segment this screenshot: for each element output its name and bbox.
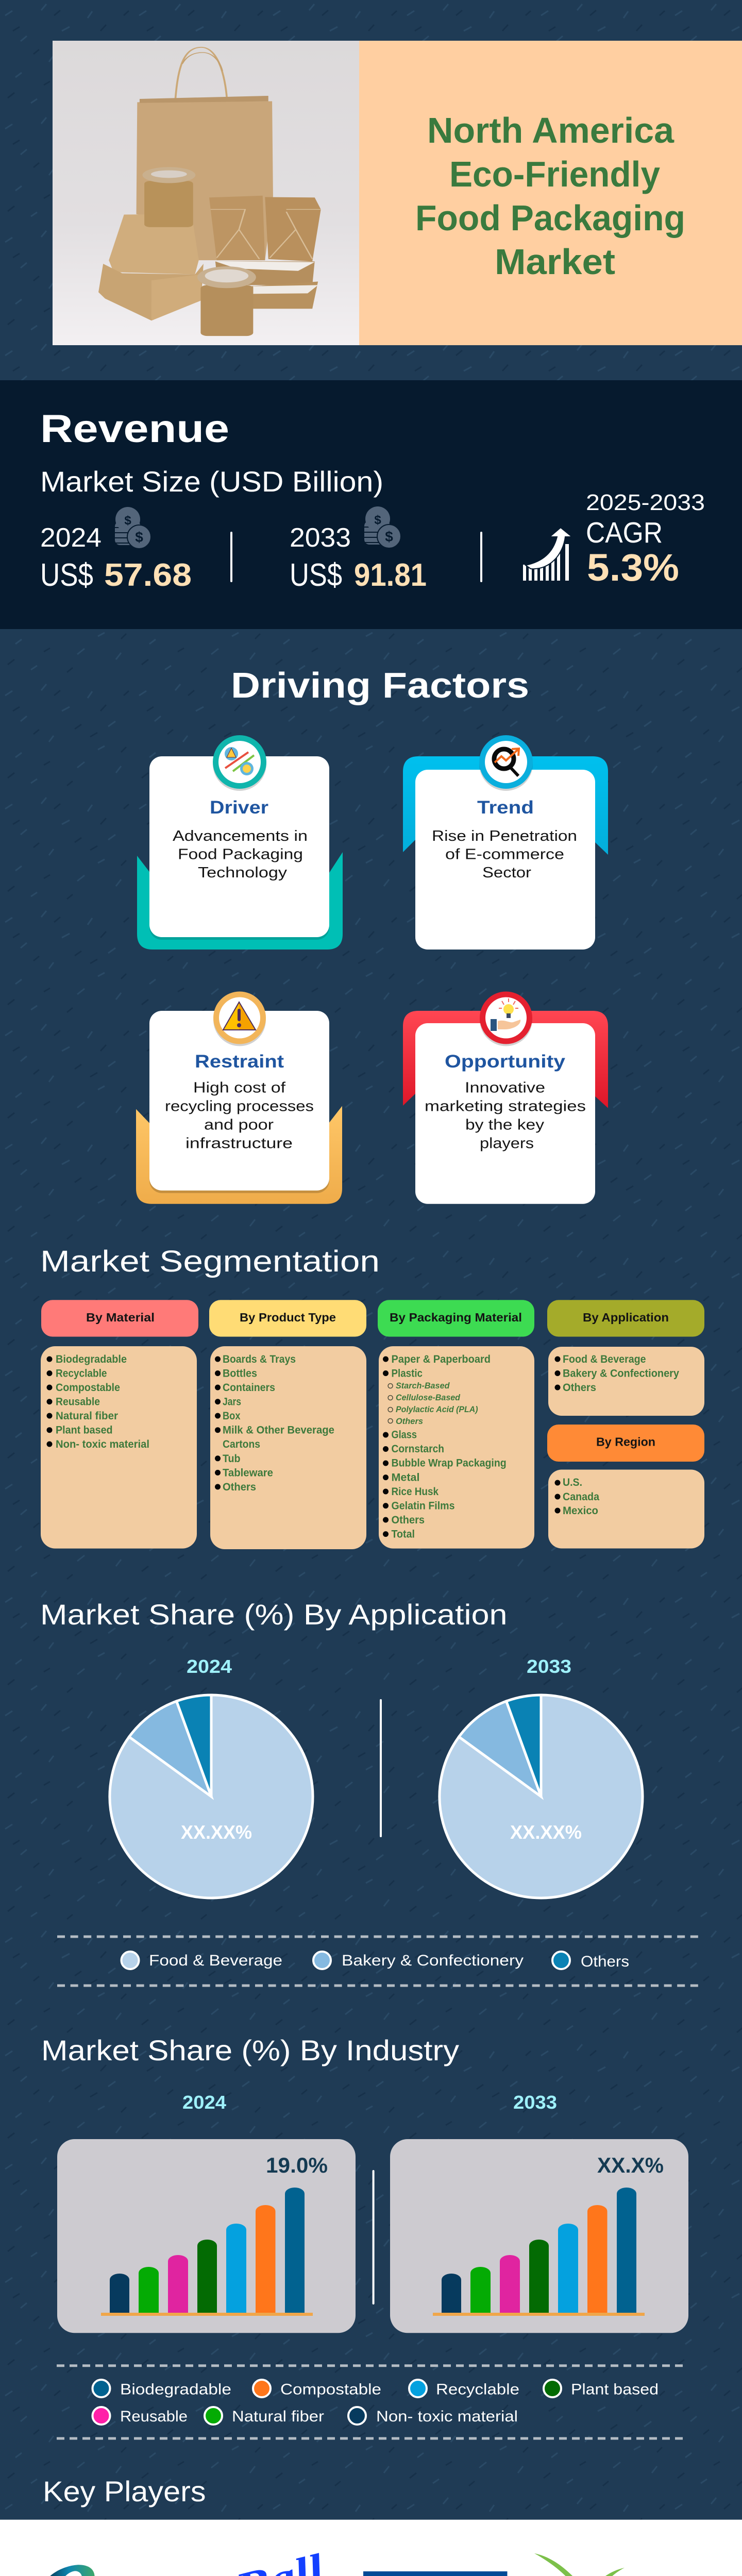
subheading: market size: Market Size (USD Billion): [40, 465, 383, 498]
header: by region: [547, 1425, 704, 1462]
label: trend: Trend: [477, 798, 534, 818]
year label 2024: 2024: [182, 2092, 226, 2113]
text: driver body: Advancements in: [173, 828, 308, 844]
text: opportunity body: [425, 1080, 586, 1151]
list: application: Food & Beverage: [563, 1353, 646, 1365]
text: trend body: Rise in Penetration: [432, 828, 577, 844]
list: material: Natural fiber: [56, 1410, 118, 1422]
panel: revenue: [0, 380, 742, 629]
list: region: Mexico: [563, 1505, 598, 1517]
stat: CAGR: 5.3%: [587, 546, 679, 589]
label: restraint: Restraint: [195, 1052, 284, 1072]
card: driver: [137, 735, 343, 950]
list: product type: Box: [223, 1410, 241, 1422]
stat: 2024: US$: [40, 557, 93, 593]
legend: industry: Recyclable: [436, 2381, 519, 2398]
bar chart: 2024: 19.0%: [266, 2153, 328, 2177]
list: product type: Tub: [223, 1453, 240, 1465]
logo: amcor: [43, 2565, 198, 2576]
column: by material: [41, 1300, 198, 1549]
heading: driving factors: Driving Factors: [231, 665, 529, 705]
text: trend body: of E-commerce: [445, 846, 564, 862]
stat: CAGR: [586, 490, 705, 589]
title: North America: [427, 110, 674, 150]
legend: industry: [93, 2380, 659, 2425]
pie chart: 2024: [110, 1695, 313, 1898]
text: restraint body: [165, 1080, 314, 1151]
logo: BeGreen: [534, 2553, 704, 2576]
list: product type: Cartons: [223, 1438, 260, 1450]
title: Eco-Friendly: [449, 154, 660, 194]
list: material: [41, 1346, 197, 1549]
pie chart: 2033: XX.XX%: [510, 1822, 582, 1843]
list: packaging material: Others: [396, 1416, 423, 1426]
list: application: Bakery & Confectionery: [563, 1367, 679, 1380]
list: packaging material: Metal: [392, 1471, 419, 1483]
text: restraint body: recycling processes: [165, 1098, 314, 1115]
list: packaging material: Plastic: [392, 1367, 423, 1380]
legend: application: [122, 1952, 629, 1970]
list: region: Canada: [563, 1491, 599, 1503]
icon: trend badge: [479, 735, 533, 791]
list: packaging material: Total: [392, 1528, 415, 1540]
label: opportunity: Opportunity: [445, 1052, 566, 1072]
text: driver body: [173, 828, 308, 881]
card: trend: [403, 735, 608, 950]
list: material: Compostable: [56, 1382, 120, 1394]
title: [415, 110, 685, 282]
list: packaging material: Polylactic Acid (PLA): [396, 1404, 478, 1414]
list: application: [548, 1347, 704, 1416]
divider: [380, 1699, 382, 1837]
divider: [373, 2170, 375, 2304]
list: packaging material: Starch-Based: [396, 1381, 450, 1391]
legend: application: Bakery & Confectionery: [342, 1952, 524, 1969]
stat: 2024: 2024: [40, 523, 102, 553]
column: by material: By Material: [86, 1311, 155, 1324]
legend: application: Food & Beverage: [149, 1952, 282, 1969]
legend: application: Others: [581, 1953, 629, 1970]
list: product type: Tableware: [223, 1467, 273, 1479]
text: trend body: Sector: [482, 865, 531, 881]
text: restraint body: High cost of: [193, 1080, 286, 1096]
legend: industry: Reusable: [120, 2408, 188, 2425]
list: material: Biodegradable: [56, 1353, 127, 1365]
icon: coins 2024: $: [124, 514, 131, 528]
text: driver body: Technology: [198, 865, 288, 881]
heading: revenue: Revenue: [40, 407, 229, 451]
title: Market: [495, 242, 615, 282]
card: opportunity: [403, 991, 608, 1204]
icon: coins 2033: [364, 506, 401, 548]
bar chart: 2033: [390, 2139, 688, 2333]
stat: 2033: 91.81: [354, 557, 427, 593]
bar chart: 2033: XX.X%: [597, 2153, 664, 2177]
list: product type: Others: [223, 1481, 256, 1493]
icon: opportunity badge: [480, 991, 532, 1046]
column: by application and region: [547, 1300, 704, 1549]
list: packaging material: Glass: [392, 1429, 417, 1441]
icon: coins 2024: $: [135, 529, 143, 545]
stat: 2033: 2033: [290, 523, 351, 553]
year label 2033: 2033: [513, 2092, 557, 2113]
list: product type: Bottles: [223, 1367, 257, 1380]
year label 2024: 2024: [187, 1656, 232, 1677]
list: packaging material: Cornstarch: [392, 1443, 444, 1455]
list: product type: Milk & Other Beverage: [223, 1425, 334, 1436]
heading: market share by application: Market Share (%) By Application: [40, 1598, 507, 1631]
list: product type: Jars: [223, 1396, 241, 1408]
legend: industry: Compostable: [280, 2381, 381, 2398]
list: packaging material: Rice Husk: [392, 1486, 439, 1498]
list: packaging material: Gelatin Films: [392, 1500, 454, 1512]
icon: driver badge: [213, 735, 266, 791]
stat: CAGR: CAGR: [586, 516, 663, 549]
list: region: [548, 1469, 704, 1549]
list: product type: Boards & Trays: [223, 1353, 296, 1365]
stat: 2033: US$: [290, 557, 342, 593]
heading: key players: Key Players: [43, 2475, 206, 2507]
legend: industry: Plant based: [571, 2381, 659, 2398]
text: opportunity body: marketing strategies: [425, 1098, 586, 1115]
icon: coins 2033: $: [374, 513, 381, 527]
column: by product type: By Product Type: [240, 1311, 336, 1324]
column: by packaging material: [378, 1300, 534, 1549]
stat: 2024: [40, 523, 192, 593]
card: restraint: [136, 991, 342, 1204]
divider: [230, 532, 232, 582]
legend: industry: Non- toxic material: [376, 2408, 518, 2425]
heading: market share by industry: Market Share (%) By Industry: [41, 2034, 459, 2066]
header panel: [53, 41, 742, 345]
list: application: Others: [563, 1382, 596, 1394]
stat: 2024: 57.68: [104, 557, 192, 593]
legend: industry: Natural fiber: [232, 2408, 324, 2425]
icon: growth arrow: [523, 528, 572, 581]
icon: coins 2033: $: [385, 529, 393, 545]
list: material: Non- toxic material: [56, 1438, 149, 1450]
logo: BASF: [363, 2570, 507, 2576]
photo: paper food packaging: [53, 41, 359, 345]
panel: key players logos: [0, 2520, 742, 2576]
label: driver: Driver: [210, 798, 268, 818]
column: by product type: [209, 1300, 366, 1549]
column: by packaging material: By Packaging Material: [390, 1311, 522, 1324]
text: opportunity body: players: [480, 1135, 534, 1151]
text: opportunity body: by the key: [465, 1117, 545, 1133]
icon: coins 2024: [115, 507, 151, 549]
list: packaging material: Others: [392, 1514, 425, 1526]
list: packaging material: [379, 1346, 534, 1549]
list: product type: [210, 1346, 366, 1549]
text: trend body: [432, 828, 577, 881]
legend: industry: Biodegradable: [120, 2381, 231, 2398]
list: material: Recyclable: [56, 1367, 107, 1380]
title panel: [359, 41, 742, 345]
title: Food Packaging: [415, 198, 685, 238]
stat: 2033: [290, 523, 427, 593]
text: driver body: Food Packaging: [178, 846, 303, 862]
list: packaging material: Cellulose-Based: [396, 1393, 461, 1402]
list: product type: Containers: [223, 1382, 275, 1394]
text: restraint body: and poor: [204, 1117, 274, 1133]
bar chart: 2024: [57, 2139, 356, 2333]
heading: market segmentation: Market Segmentation: [40, 1245, 380, 1278]
column: by application and region: By Application: [583, 1311, 669, 1324]
icon: restraint badge: [213, 991, 266, 1046]
pie chart: 2024: XX.XX%: [181, 1822, 252, 1843]
header: by region: By Region: [596, 1435, 655, 1449]
year label 2033: 2033: [527, 1656, 571, 1677]
divider: [480, 532, 482, 582]
stat: CAGR: 2025-2033: [586, 490, 705, 515]
list: material: Reusable: [56, 1396, 100, 1408]
list: material: Plant based: [56, 1425, 113, 1436]
text: restraint body: infrastructure: [185, 1135, 293, 1151]
text: opportunity body: Innovative: [465, 1080, 545, 1096]
list: packaging material: Bubble Wrap Packaging: [392, 1458, 507, 1469]
list: packaging material: Paper & Paperboard: [392, 1353, 491, 1365]
pie chart: 2033: [440, 1695, 643, 1898]
list: region: U.S.: [563, 1477, 582, 1488]
